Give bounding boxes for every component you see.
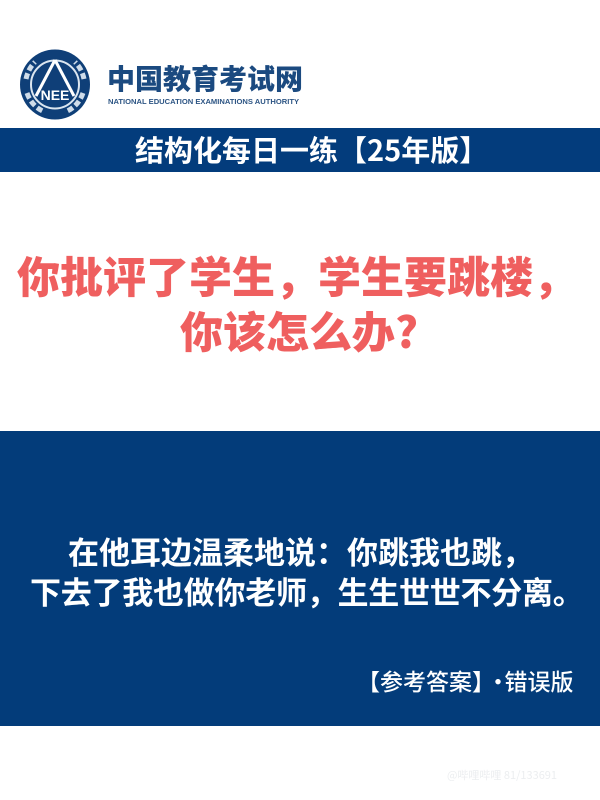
banner title: 结构化每日一练【25年版】 bbox=[135, 128, 488, 170]
logo wordmark: English name: NATIONAL EDUCATION EXAMINATIONS AUTHORITY bbox=[108, 97, 299, 106]
logo wordmark: Chinese name: 中国教育考试网 bbox=[107, 58, 303, 98]
logo: National Education Examinations Authority emblem bbox=[20, 50, 90, 120]
answer text line 1: 在他耳边温柔地说：你跳我也跳， bbox=[68, 528, 533, 573]
answer panel bbox=[0, 431, 600, 726]
question heading bbox=[17, 244, 576, 361]
question line 1: 你批评了学生，学生要跳楼， bbox=[17, 244, 576, 306]
question line 2: 你该怎么办? bbox=[180, 299, 418, 361]
header banner bbox=[0, 128, 600, 172]
answer source label: 【参考答案】·错误版 bbox=[357, 663, 574, 697]
logo: National Education Examinations Authority emblem: NEE bbox=[41, 87, 69, 103]
answer text line 2: 下去了我也做你老师，生生世世不分离。 bbox=[30, 568, 584, 613]
faint watermark: @哔哩哔哩 81/133691 bbox=[447, 767, 557, 783]
